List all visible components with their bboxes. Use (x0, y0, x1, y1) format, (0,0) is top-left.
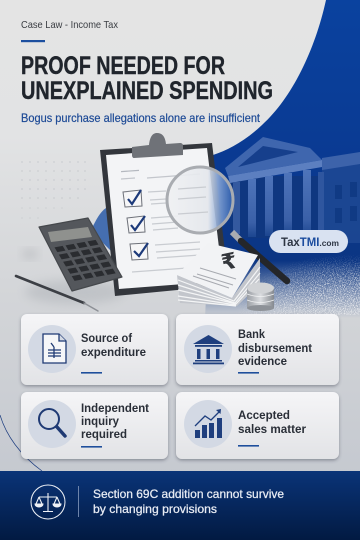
pen (16, 276, 98, 311)
coins (247, 282, 274, 311)
card text (238, 327, 312, 368)
courthouse building (225, 137, 360, 243)
card text: disbursement (238, 341, 312, 355)
checkbox 1 (123, 190, 142, 207)
card text: evidence (238, 354, 287, 368)
clip (132, 133, 183, 158)
icon: scales (31, 485, 65, 519)
dot grid (21, 161, 86, 218)
card text (238, 408, 306, 436)
card: independent inquiry required (21, 392, 168, 459)
accent rule (21, 40, 45, 42)
logo pill (269, 230, 348, 253)
calculator (39, 218, 122, 291)
card text: sales matter (238, 422, 306, 436)
card: bank disbursement evidence (176, 314, 339, 385)
thin curve (0, 415, 42, 471)
card text: expenditure (81, 345, 146, 359)
blue curved backdrop (205, 0, 360, 318)
card text: Independent (81, 401, 149, 415)
card text: inquiry (81, 414, 119, 428)
card text (81, 331, 146, 359)
blue splash behind calculator (92, 208, 112, 252)
checkbox 2 (127, 216, 145, 233)
logo pill: TaxTMI.com (281, 237, 339, 249)
magnifying glass (167, 167, 287, 281)
icon: magnifier (39, 409, 65, 436)
card text: required (81, 427, 127, 441)
rupee symbol: ₹ (219, 249, 239, 276)
subtitle: Bogus purchase allegations alone are insufficient (21, 111, 261, 125)
footer text: Section 69C addition cannot survive (93, 487, 284, 501)
card text: Bank (238, 327, 265, 341)
title: PROOF NEEDED FOR (21, 52, 225, 80)
icon: document (43, 334, 66, 363)
card text (81, 401, 149, 441)
card: accepted sales matter (176, 392, 339, 459)
title: UNEXPLAINED SPENDING (21, 77, 273, 105)
card text: Accepted (238, 408, 290, 422)
footer text: by changing provisions (93, 502, 217, 516)
footer text (93, 487, 284, 516)
icon: bank (193, 335, 224, 364)
paper stack with rupee (177, 243, 260, 306)
checkbox 3 (130, 243, 148, 260)
card: source of expenditure (21, 314, 168, 385)
icon: rising chart (195, 409, 222, 438)
ground shadow (25, 280, 125, 304)
card text: Source of (81, 331, 133, 345)
speckled fade of backdrop (244, 256, 360, 315)
top label: Case Law - Income Tax (21, 19, 119, 31)
footer band (0, 471, 360, 540)
title (21, 52, 273, 105)
spray patch left of calculator (22, 249, 38, 259)
clipboard (100, 133, 229, 296)
